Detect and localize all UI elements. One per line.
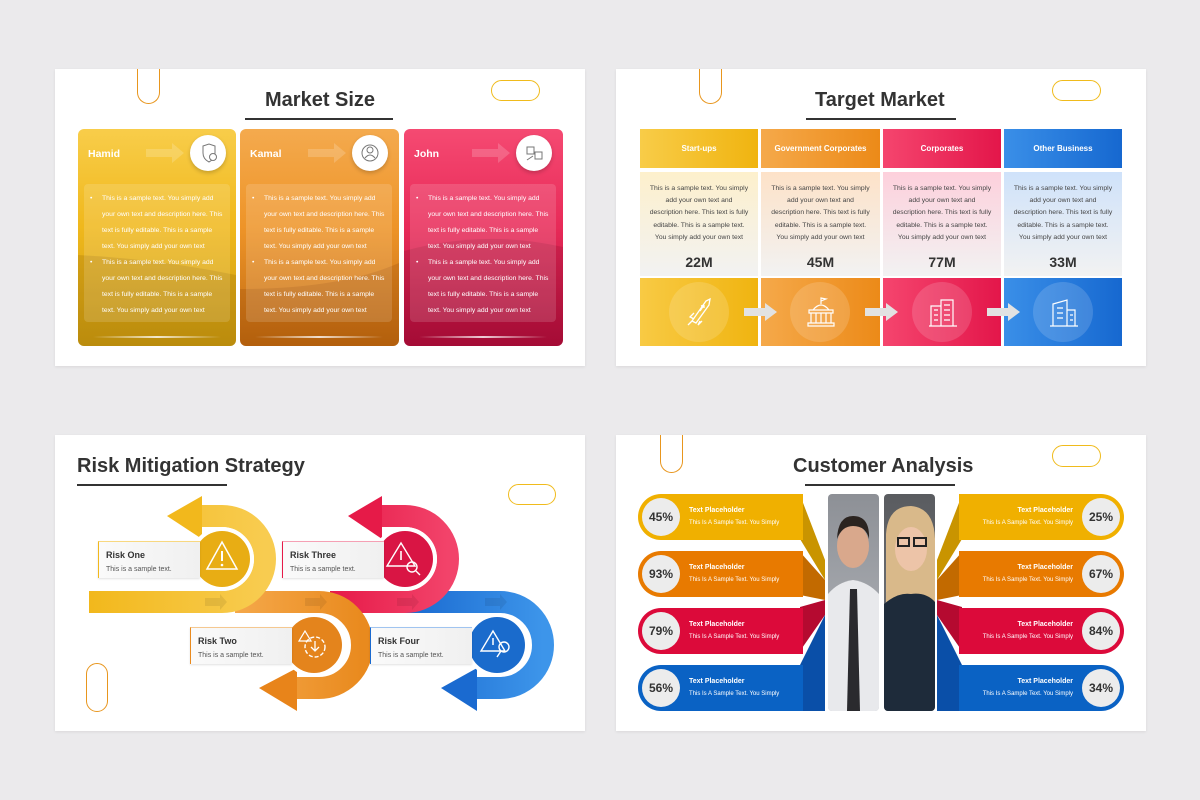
title: risk mitigation: Risk Mitigation Strategy (77, 455, 305, 477)
panel: target market: This is a sample text. You simply (1014, 185, 1112, 192)
decorative pill (491, 80, 540, 101)
panel: target market: description here. This text is fully (650, 209, 748, 216)
row 45%: This Is A Sample Text. You Simply (689, 520, 779, 526)
card: Kamal: text is fully editable. This is a sample (264, 227, 374, 234)
row 45% (638, 494, 803, 540)
icon circle: risk three (373, 527, 437, 591)
card: Kamal: Kamal (250, 148, 282, 160)
card: John: John (414, 148, 439, 160)
icon circle: risk four (465, 613, 529, 677)
yellow arrow (89, 496, 265, 602)
row 93% (638, 551, 803, 597)
right rows (959, 494, 1124, 711)
panel: target market: editable. This is a sample text. (896, 222, 988, 229)
row 34%: This Is A Sample Text. You Simply (983, 691, 1073, 697)
card: Kamal: text. You simply add your own text (264, 243, 367, 250)
column: other business (1004, 129, 1122, 346)
label: risk three (282, 541, 384, 578)
panel: target market: You simply add your own text (776, 234, 865, 241)
panel: target market: You simply add your own text (898, 234, 986, 241)
panel: risk mitigation strategy (55, 435, 585, 731)
label: risk one: This is a sample text. (106, 566, 172, 573)
row 56% (638, 665, 803, 711)
panel: target market: add your own text and (666, 197, 732, 204)
column: government corporates (761, 129, 880, 346)
label: risk two (190, 627, 292, 664)
card: Hamid: Hamid (88, 148, 120, 160)
row 34% (959, 665, 1124, 711)
panel: target market: This is a sample text. You simply (650, 185, 748, 192)
card: Hamid: text. You simply add your own text (102, 243, 205, 250)
panel: target market: Other Business (1033, 144, 1093, 153)
panel: target market: editable. This is a sample text. (1017, 222, 1109, 229)
icon circle: risk two (282, 613, 346, 677)
photo: man (828, 494, 879, 711)
panel: target market: description here. This text is fully (893, 209, 991, 216)
row 79%: Text Placeholder (689, 621, 745, 628)
panel: target market: You simply add your own text (655, 234, 743, 241)
card: Hamid: your own text and description here. This (102, 211, 222, 218)
row 67% (959, 551, 1124, 597)
arrows diagram (89, 496, 554, 711)
arrow 3 (987, 303, 1020, 321)
row 34%: Text Placeholder (1017, 678, 1073, 685)
panel: target market: 22M (685, 254, 713, 270)
card: John: This is a sample text. You simply add (428, 195, 539, 202)
row 67%: Text Placeholder (1017, 564, 1073, 571)
card: John: your own text and description here. This (428, 275, 548, 282)
panel: target market: description here. This text is fully (1014, 209, 1112, 216)
row 93%: Text Placeholder (689, 564, 745, 571)
decorative pill (1052, 80, 1101, 101)
card: Hamid: This is a sample text. You simply add (102, 195, 213, 202)
card: John: your own text and description here. This (428, 211, 548, 218)
label: risk three: This is a sample text. (290, 566, 356, 573)
panel: target market: 33M (1049, 254, 1077, 270)
red arrow (330, 496, 448, 602)
orange arrow (235, 602, 362, 711)
card: John: text. You simply add your own text (428, 243, 531, 250)
title: target market: Target Market (815, 89, 945, 111)
row 67%: 67% (1089, 567, 1113, 581)
card: John: This is a sample text. You simply add (428, 259, 539, 266)
row 25% (959, 494, 1124, 540)
connectors (800, 502, 962, 711)
row 79%: 79% (649, 624, 673, 638)
column: start-ups (640, 129, 758, 346)
panel: target market: Government Corporates (774, 144, 867, 153)
row 25%: 25% (1089, 510, 1113, 524)
panel: target market: 77M (928, 254, 956, 270)
card: Hamid: text is fully editable. This is a sample (102, 291, 212, 298)
label: risk one (98, 541, 200, 578)
row 84%: 84% (1089, 624, 1113, 638)
panel: customer analysis (616, 435, 1146, 731)
decorative pill (1052, 445, 1101, 467)
card: Hamid: This is a sample text. You simply add (102, 259, 213, 266)
row 93%: 93% (649, 567, 673, 581)
row 34%: 34% (1089, 681, 1113, 695)
label: risk three: Risk Three (290, 550, 336, 560)
card: Hamid: text. You simply add your own text (102, 307, 205, 314)
label: risk one: Risk One (106, 550, 145, 560)
left rows (638, 494, 803, 711)
title: market size: Market Size (265, 89, 375, 111)
row 84% (959, 608, 1124, 654)
card: Kamal: your own text and description here. This (264, 275, 384, 282)
label: risk four (370, 627, 472, 664)
card: Kamal (240, 129, 399, 346)
panel: target market: Start-ups (681, 144, 717, 153)
decorative clip (86, 663, 108, 712)
card: John (404, 129, 563, 346)
panel: target market: add your own text and (909, 197, 975, 204)
title: customer analysis: Customer Analysis (793, 455, 973, 477)
decorative pill (508, 484, 556, 505)
label: risk two: This is a sample text. (198, 652, 264, 659)
panel: target market (616, 69, 1146, 366)
decorative clip (137, 69, 160, 104)
panel: target market: add your own text and (1030, 197, 1096, 204)
arrow 1 (744, 303, 777, 321)
card: Hamid (78, 129, 236, 346)
panel: target market: This is a sample text. You simply (771, 185, 870, 192)
row 93%: This Is A Sample Text. You Simply (689, 577, 779, 583)
row 84%: Text Placeholder (1017, 621, 1073, 628)
card: Kamal: your own text and description here. This (264, 211, 384, 218)
row 79%: This Is A Sample Text. You Simply (689, 634, 779, 640)
card: Kamal: This is a sample text. You simply add (264, 195, 375, 202)
photo: woman (884, 494, 935, 711)
column: corporates (883, 129, 1001, 346)
panel: target market: This is a sample text. You simply (893, 185, 991, 192)
blue arrow (405, 602, 543, 711)
row 79% (638, 608, 803, 654)
card: John: text. You simply add your own text (428, 307, 531, 314)
row 45%: Text Placeholder (689, 507, 745, 514)
decorative clip (660, 435, 683, 473)
row 84%: This Is A Sample Text. You Simply (983, 634, 1073, 640)
label: risk two: Risk Two (198, 636, 237, 646)
row 67%: This Is A Sample Text. You Simply (983, 577, 1073, 583)
row 56%: Text Placeholder (689, 678, 745, 685)
panel: target market: editable. This is a sample text. (775, 222, 866, 229)
panel: market size (55, 69, 585, 366)
card: Kamal: text is fully editable. This is a sample (264, 291, 374, 298)
row 56%: 56% (649, 681, 673, 695)
label: risk four: This is a sample text. (378, 652, 444, 659)
panel: target market: editable. This is a sample text. (653, 222, 745, 229)
label: risk four: Risk Four (378, 636, 420, 646)
row 25%: Text Placeholder (1017, 507, 1073, 514)
arrow 2 (865, 303, 898, 321)
panel: target market: description here. This text is fully (771, 209, 870, 216)
panel: target market: add your own text and (787, 197, 854, 204)
card: John: text is fully editable. This is a sample (428, 227, 538, 234)
card: Hamid: text is fully editable. This is a sample (102, 227, 212, 234)
row 25%: This Is A Sample Text. You Simply (983, 520, 1073, 526)
panel: target market: Corporates (921, 144, 963, 153)
card: Hamid: your own text and description here. This (102, 275, 222, 282)
panel: target market: 45M (807, 254, 834, 270)
card: Kamal: text. You simply add your own text (264, 307, 367, 314)
icon circle: risk one (190, 527, 254, 591)
card: Kamal: This is a sample text. You simply add (264, 259, 375, 266)
panel: target market: You simply add your own text (1019, 234, 1107, 241)
row 56%: This Is A Sample Text. You Simply (689, 691, 779, 697)
decorative clip (699, 69, 722, 104)
card: John: text is fully editable. This is a sample (428, 291, 538, 298)
row 45%: 45% (649, 510, 673, 524)
